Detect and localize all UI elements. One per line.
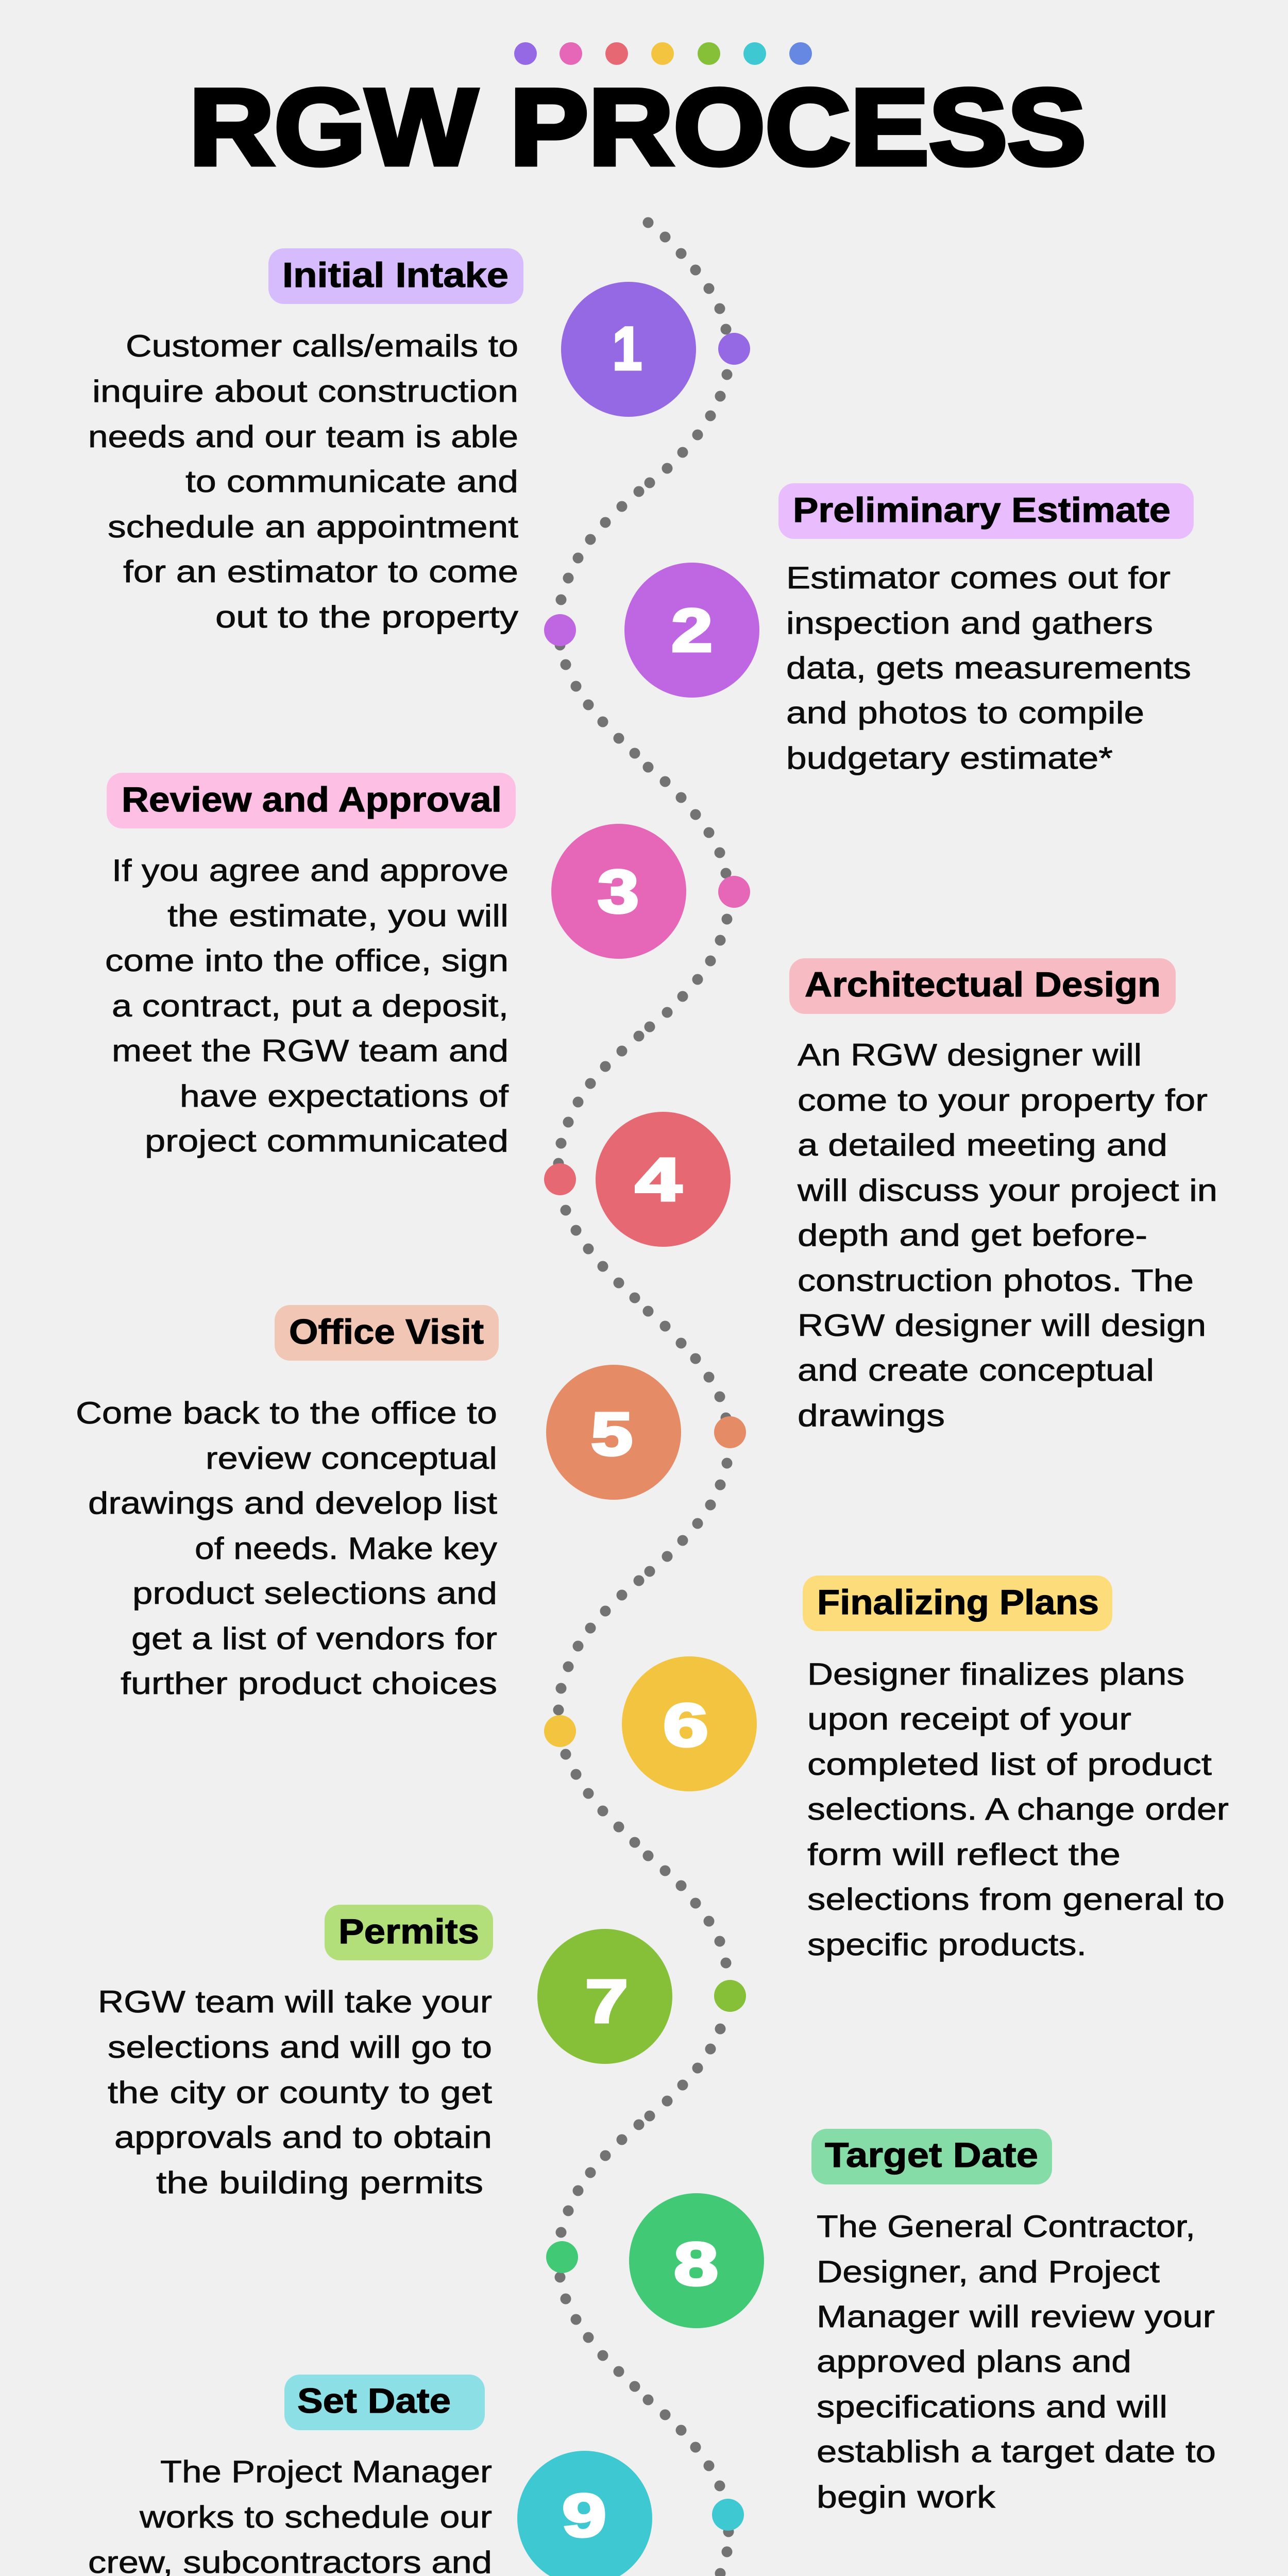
description 9: The Project Manager xyxy=(160,2454,492,2489)
step 2: Preliminary Estimate xyxy=(544,483,1194,775)
tag: Initial Intake: Initial Intake xyxy=(282,256,509,295)
description 8: begin work xyxy=(817,2480,996,2514)
description 1 xyxy=(88,329,518,634)
description 5: get a list of vendors for xyxy=(131,1621,497,1656)
tag: Architectual Design: Architectual Design xyxy=(805,965,1161,1004)
tag: Office Visit xyxy=(275,1305,499,1361)
description 1: inquire about construction xyxy=(92,374,518,409)
tag: Target Date: Target Date xyxy=(825,2136,1038,2175)
description 1: needs and our team is able xyxy=(88,419,518,454)
path marker 3 xyxy=(718,876,750,908)
description 4: construction photos. The xyxy=(798,1263,1194,1298)
description 5: review conceptual xyxy=(206,1441,497,1476)
description 2: Estimator comes out for xyxy=(786,561,1171,595)
description 5 xyxy=(76,1396,497,1701)
number circle 8: 8 xyxy=(674,2230,718,2298)
description 7 xyxy=(98,1985,492,2200)
step 8: Target Date xyxy=(546,2129,1216,2514)
description 8: The General Contractor, xyxy=(817,2209,1195,2244)
tag: Permits xyxy=(325,1905,493,1960)
description 4 xyxy=(797,1038,1217,1433)
description 5: further product choices xyxy=(121,1666,497,1701)
description 8 xyxy=(817,2209,1216,2514)
description 3 xyxy=(105,853,509,1158)
description 5: Come back to the office to xyxy=(76,1396,497,1430)
number circle 3 xyxy=(551,824,686,959)
description 8: Designer, and Project xyxy=(817,2255,1160,2289)
description 1: Customer calls/emails to xyxy=(126,329,518,363)
number circle 2 xyxy=(624,563,759,698)
description 4: RGW designer will design xyxy=(798,1308,1206,1343)
path marker 5 xyxy=(714,1416,746,1448)
description 3: come into the office, sign xyxy=(105,943,509,978)
number circle 8 xyxy=(629,2193,764,2328)
decorative colored dots row xyxy=(514,42,812,65)
number circle 9: 9 xyxy=(562,2482,606,2550)
description 3: meet the RGW team and xyxy=(112,1033,509,1068)
tag: Preliminary Estimate xyxy=(778,483,1194,539)
description 4: drawings xyxy=(798,1398,945,1433)
description 7: RGW team will take your xyxy=(98,1985,492,2019)
tag: Initial Intake xyxy=(268,248,523,304)
description 5: of needs. Make key xyxy=(195,1531,497,1566)
description 6: selections from general to xyxy=(807,1882,1225,1917)
description 4: depth and get before- xyxy=(798,1218,1147,1252)
tag: Finalizing Plans xyxy=(803,1575,1112,1631)
description 5: product selections and xyxy=(132,1576,497,1611)
description 6: specific products. xyxy=(807,1927,1087,1962)
description 9 xyxy=(84,2454,492,2576)
tag: Permits: Permits xyxy=(338,1912,479,1951)
tag: Target Date xyxy=(811,2129,1052,2184)
description 1: to communicate and xyxy=(185,464,518,499)
tag: Preliminary Estimate: Preliminary Estimate xyxy=(793,490,1171,530)
description 2: inspection and gathers xyxy=(786,606,1153,640)
path marker 4 xyxy=(544,1163,576,1195)
description 6 xyxy=(807,1657,1229,1962)
description 2 xyxy=(786,561,1191,775)
description 4: will discuss your project in xyxy=(797,1173,1217,1208)
description 7: the city or county to get xyxy=(108,2075,492,2110)
number circle 1 xyxy=(561,282,696,417)
description 5: drawings and develop list xyxy=(88,1486,497,1520)
path marker 1 xyxy=(718,333,750,365)
tag: Set Date: Set Date xyxy=(297,2381,451,2420)
step 6: Finalizing Plans xyxy=(544,1575,1229,1962)
description 3: If you agree and approve xyxy=(112,853,509,888)
description 3: the estimate, you will xyxy=(167,899,509,933)
number circle 9 xyxy=(517,2451,652,2576)
tag: Office Visit: Office Visit xyxy=(289,1312,484,1351)
step 1: Initial Intake xyxy=(88,248,750,634)
tag: Review and Approval: Review and Approval xyxy=(122,780,502,819)
description 4: An RGW designer will xyxy=(798,1038,1142,1072)
number circle 3: 3 xyxy=(598,858,639,926)
number circle 7 xyxy=(537,1929,672,2064)
step 4: Architectual Design xyxy=(544,958,1217,1433)
description 4: and create conceptual xyxy=(798,1353,1154,1387)
number circle 5 xyxy=(546,1365,681,1500)
description 4: come to your property for xyxy=(798,1083,1208,1117)
tag: Review and Approval xyxy=(107,773,516,828)
number circle 6 xyxy=(622,1656,757,1791)
description 3: a contract, put a deposit, xyxy=(112,989,509,1023)
description 2: budgetary estimate* xyxy=(786,741,1113,775)
description 6: Designer finalizes plans xyxy=(807,1657,1184,1691)
step 5: Office Visit xyxy=(76,1305,746,1701)
description 3: project communicated xyxy=(145,1124,509,1158)
description 7: selections and will go to xyxy=(108,2030,492,2064)
path marker 2 xyxy=(544,614,576,646)
description 4: a detailed meeting and xyxy=(798,1128,1167,1162)
description 8: establish a target date to xyxy=(817,2434,1216,2469)
number circle 4: 4 xyxy=(635,1146,682,1214)
tag: Set Date xyxy=(284,2375,485,2430)
description 1: for an estimator to come xyxy=(123,554,518,589)
dotted wave path xyxy=(558,223,734,2576)
description 7: the building permits xyxy=(156,2165,483,2200)
step 3: Review and Approval xyxy=(105,773,750,1158)
description 6: selections. A change order xyxy=(807,1792,1229,1826)
description 7: approvals and to obtain xyxy=(114,2120,492,2155)
description 2: data, gets measurements xyxy=(786,651,1191,685)
description 1: schedule an appointment xyxy=(108,510,518,544)
number circle 7: 7 xyxy=(585,1968,628,2036)
path marker 6 xyxy=(544,1715,576,1747)
tag: Architectual Design xyxy=(789,958,1176,1014)
description 6: form will reflect the xyxy=(807,1837,1121,1872)
description 9: works to schedule our xyxy=(139,2500,492,2534)
description 6: completed list of product xyxy=(807,1747,1212,1782)
description 3: have expectations of xyxy=(180,1079,509,1113)
path marker 8 xyxy=(546,2241,578,2273)
number circle 6: 6 xyxy=(663,1691,708,1759)
description 8: specifications and will xyxy=(817,2389,1167,2424)
tag: Finalizing Plans: Finalizing Plans xyxy=(817,1583,1099,1622)
path marker 7 xyxy=(714,1980,746,2012)
number circle 5: 5 xyxy=(591,1400,633,1468)
description 8: approved plans and xyxy=(817,2344,1131,2379)
description 1: out to the property xyxy=(215,600,518,634)
description 8: Manager will review your xyxy=(817,2299,1215,2334)
step 9: Set Date xyxy=(84,2375,744,2576)
number circle 1: 1 xyxy=(613,315,642,383)
description 6: upon receipt of your xyxy=(807,1702,1131,1736)
description 2: and photos to compile xyxy=(786,696,1144,730)
number circle 2: 2 xyxy=(671,597,713,665)
number circle 4 xyxy=(596,1112,731,1247)
step 7: Permits xyxy=(98,1905,746,2200)
path marker 9 xyxy=(712,2499,744,2531)
title: RGW PROCESS xyxy=(189,66,1086,188)
